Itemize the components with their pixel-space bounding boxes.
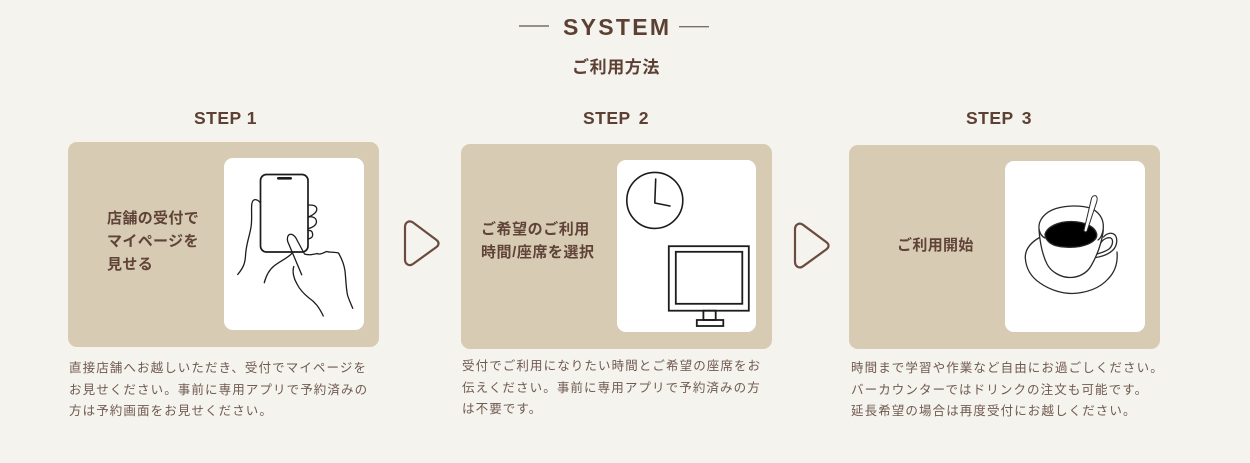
label: step 1: マイページを: [107, 233, 199, 250]
label: step 3: ご利用開始: [897, 237, 974, 254]
title rule: left: [519, 25, 549, 27]
panel: step 3: [849, 145, 1160, 349]
description: step 1: お見せください。事前に専用アプリで予約済みの: [69, 382, 368, 396]
icon: hand holding phone: [238, 174, 353, 316]
panel: step 1: [68, 142, 379, 347]
description: step 3: 延長希望の場合は再度受付にお越しください。: [851, 404, 1137, 418]
description: step 2: は不要です。: [462, 402, 542, 416]
description: step 2: 伝えください。事前に専用アプリで予約済みの方: [462, 380, 761, 394]
description: step 1: 方は予約画面をお見せください。: [69, 404, 273, 418]
label: step 2: 時間/座席を選択: [481, 244, 595, 261]
label: step 2: [481, 221, 595, 261]
label: step 1: 見せる: [107, 256, 153, 273]
description: step 2: 受付でご利用になりたい時間とご希望の座席をお: [462, 359, 761, 373]
title: SYSTEM: SYSTEM: [563, 14, 671, 40]
panel: step 3 image: [1004, 160, 1144, 332]
description: step 2: [462, 359, 761, 416]
heading: step 2: STEP 2: [583, 108, 649, 128]
panel: step 1 image: [224, 158, 364, 330]
subtitle: ご利用方法: [572, 58, 660, 77]
description: step 1: 直接店舗へお越しいただき、受付でマイページを: [69, 361, 367, 375]
arrow: step 2 to 3: [795, 224, 829, 267]
icon: clock: [627, 172, 683, 228]
icon: monitor: [669, 246, 749, 326]
panel: step 2 image: [616, 160, 756, 332]
description: step 1: [69, 361, 368, 418]
label: step 1: 店舗の受付で: [107, 210, 199, 227]
heading: step 3: STEP 3: [966, 108, 1032, 128]
heading: step 1: STEP 1: [194, 108, 257, 128]
icon: coffee cup: [1025, 196, 1117, 294]
panel: step 2: [461, 144, 772, 348]
label: step 1: [107, 210, 199, 273]
description: step 3: バーカウンターではドリンクの注文も可能です。: [851, 382, 1148, 396]
description: step 3: 時間まで学習や作業など自由にお過ごしください。: [851, 361, 1164, 375]
arrow: step 1 to 2: [405, 221, 439, 265]
label: step 2: ご希望のご利用: [481, 221, 590, 238]
title rule: right: [679, 26, 709, 28]
description: step 3: [851, 361, 1164, 418]
